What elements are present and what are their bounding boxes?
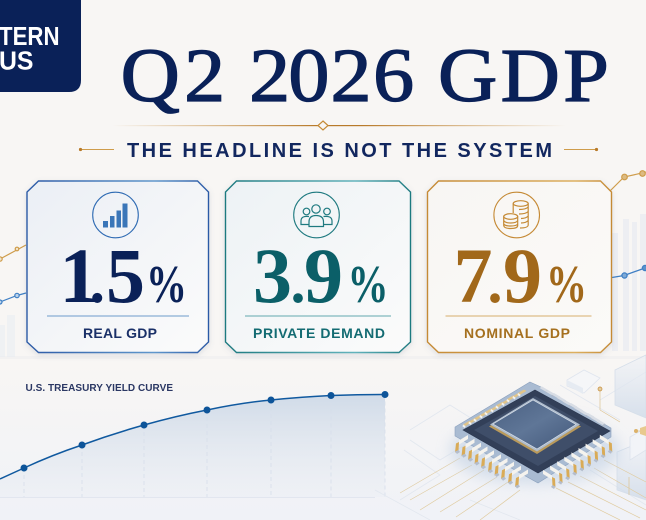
chip substrate xyxy=(463,390,610,473)
value: 7.9%: 9 xyxy=(503,232,542,319)
icon: microchip xyxy=(450,382,620,489)
icon: people xyxy=(294,192,339,238)
data points xyxy=(20,391,388,472)
icon: bar chart xyxy=(93,192,138,238)
title: Q22026GDP xyxy=(121,35,609,118)
gold traces xyxy=(400,458,646,520)
background trend line: gold left xyxy=(0,245,26,261)
chip back pins xyxy=(462,386,606,428)
background decoration: faint bars right xyxy=(612,214,646,351)
label: nominal GDP: NOMINAL GDP xyxy=(464,325,570,341)
logo text: TERN xyxy=(0,23,60,51)
background trend line: blue right xyxy=(612,265,646,278)
chart title: U.S. TREASURY YIELD CURVE xyxy=(26,383,173,394)
background circuit lines xyxy=(375,372,646,520)
icon: coins xyxy=(494,192,540,238)
value: 1.5%: . xyxy=(90,248,105,316)
background trend line: gold right xyxy=(610,171,646,191)
chart area fill xyxy=(0,394,385,497)
value: 7.9% xyxy=(454,232,587,319)
value: 1.5%: 1 xyxy=(60,232,98,319)
value: 7.9%: 7 xyxy=(454,232,492,319)
yield curve line xyxy=(0,394,385,479)
logo text xyxy=(0,23,60,76)
subtitle: THE HEADLINE IS NOT THE SYSTEM xyxy=(127,140,552,162)
logo text: US xyxy=(0,48,34,76)
panel: private demand xyxy=(226,181,410,352)
subtitle ornament left xyxy=(79,148,114,151)
panel: nominal GDP xyxy=(428,181,612,352)
background trend line: blue left xyxy=(0,293,26,304)
label: private demand: PRIVATE DEMAND xyxy=(253,325,385,341)
value: 1.5%: 5 xyxy=(106,232,145,319)
value: 7.9%: . xyxy=(488,249,502,315)
subtitle ornament right xyxy=(564,148,598,151)
panel: real GDP xyxy=(27,181,208,352)
background decoration: faint bars left xyxy=(0,315,15,357)
value: 1.5%: % xyxy=(146,256,187,314)
value: 3.9%: 9 xyxy=(304,232,343,319)
label: real GDP: REAL GDP xyxy=(83,325,157,341)
value: 3.9%: % xyxy=(348,256,388,314)
value: 3.9% xyxy=(253,232,388,319)
chart: U.S. Treasury yield curve xyxy=(0,383,388,498)
value: 1.5% xyxy=(60,232,187,319)
glass cubes xyxy=(567,355,646,500)
value: 3.9%: 3 xyxy=(253,232,292,319)
value: 7.9%: % xyxy=(546,256,587,314)
chip front pins xyxy=(455,435,612,489)
chip die xyxy=(489,399,581,454)
divider with diamond xyxy=(112,121,566,130)
value: 3.9%: . xyxy=(290,249,306,315)
logo badge xyxy=(0,0,81,92)
